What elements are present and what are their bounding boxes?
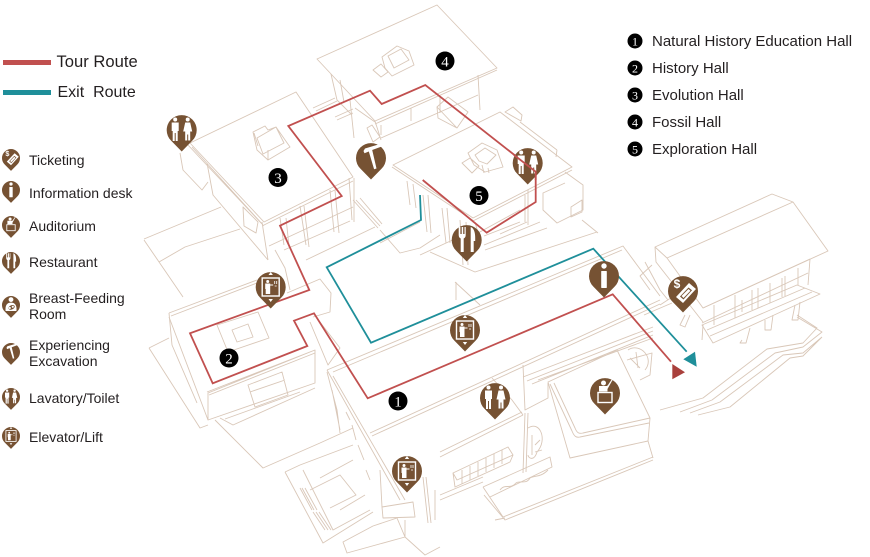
map pin: elevator education hall bbox=[450, 315, 480, 352]
hall 4: Fossil Hall bbox=[652, 114, 721, 131]
building 4: fossil hall bbox=[313, 5, 497, 142]
hall list legend bbox=[628, 33, 852, 158]
hall marker 5: 5 bbox=[475, 189, 483, 205]
map pin: ticketing bbox=[668, 276, 698, 312]
legend: lavatory: Lavatory/Toilet bbox=[29, 390, 119, 406]
hall marker 1: 1 bbox=[394, 394, 402, 410]
hall marker 4 bbox=[436, 52, 454, 70]
hall marker 2 bbox=[220, 348, 238, 368]
hall 1: Natural History Education Hall bbox=[652, 33, 852, 50]
legend: elevator bbox=[2, 427, 103, 449]
building 2: history hall bbox=[149, 279, 340, 468]
legend: information desk: Information desk bbox=[29, 185, 133, 201]
hall 5: 5 bbox=[632, 142, 638, 156]
map pin: toilet exploration hall bbox=[513, 148, 543, 184]
building map line drawing bbox=[144, 5, 828, 555]
legend: auditorium bbox=[2, 216, 96, 238]
arrow: tour route end bbox=[672, 364, 685, 379]
map pin: restaurant bbox=[452, 225, 482, 262]
legend: breast-feeding room bbox=[2, 290, 125, 322]
auditorium building bbox=[548, 348, 653, 458]
legend: breast-feeding room: Room bbox=[29, 306, 66, 322]
map pin: elevator lower bbox=[392, 456, 422, 492]
legend: breast-feeding room: Breast-Feeding bbox=[29, 290, 125, 306]
legend: ticketing bbox=[2, 149, 85, 171]
hall marker 1 bbox=[388, 392, 408, 410]
map pin: elevator history hall bbox=[256, 272, 286, 308]
legend: lavatory bbox=[2, 388, 119, 410]
hall 5: Exploration Hall bbox=[652, 141, 757, 158]
map pin: toilet education hall bbox=[480, 383, 510, 420]
legend: exit route: Exit Route bbox=[58, 84, 136, 101]
map pin: toilet evolution hall bbox=[167, 115, 197, 152]
legend: information desk bbox=[2, 181, 133, 203]
hall 3: 3 bbox=[632, 88, 638, 102]
legend: experiencing excavation: Experiencing bbox=[29, 337, 110, 353]
map pin: excavation bbox=[356, 143, 386, 180]
building 1: natural history education hall bbox=[327, 246, 660, 520]
legend: elevator: Elevator/Lift bbox=[29, 429, 103, 445]
legend: ticketing: Ticketing bbox=[29, 152, 85, 168]
tour route: red path bbox=[190, 85, 671, 398]
hall marker 5 bbox=[470, 186, 488, 205]
hall marker 3 bbox=[268, 168, 288, 187]
hall marker 2: 2 bbox=[225, 352, 233, 368]
hall 1: 1 bbox=[632, 34, 638, 48]
hall marker 3: 3 bbox=[274, 171, 282, 187]
legend: auditorium: Auditorium bbox=[29, 218, 96, 234]
map pin: auditorium bbox=[590, 378, 620, 414]
legend: experiencing excavation bbox=[2, 337, 110, 369]
route overlay across toilet pin bbox=[514, 155, 536, 180]
building 5: exploration hall bbox=[380, 107, 598, 272]
legend: tour route: Tour Route bbox=[56, 52, 138, 71]
facility legend bbox=[2, 149, 133, 449]
legend: restaurant: Restaurant bbox=[29, 254, 98, 270]
hall 2: 2 bbox=[632, 62, 638, 76]
hall marker 4: 4 bbox=[441, 54, 449, 70]
map pin: information bbox=[589, 261, 619, 298]
hall 2: History Hall bbox=[652, 60, 729, 77]
route legend bbox=[3, 52, 138, 101]
hall 3: Evolution Hall bbox=[652, 87, 744, 104]
arrow: exit route end bbox=[683, 352, 697, 367]
legend: experiencing excavation: Excavation bbox=[29, 353, 97, 369]
exit route: teal path bbox=[327, 195, 687, 352]
courtyard block bbox=[285, 428, 440, 555]
building 3: evolution hall bbox=[144, 92, 382, 297]
legend: restaurant bbox=[2, 252, 98, 274]
ticketing building bbox=[640, 194, 828, 415]
hall 4: 4 bbox=[632, 116, 638, 130]
